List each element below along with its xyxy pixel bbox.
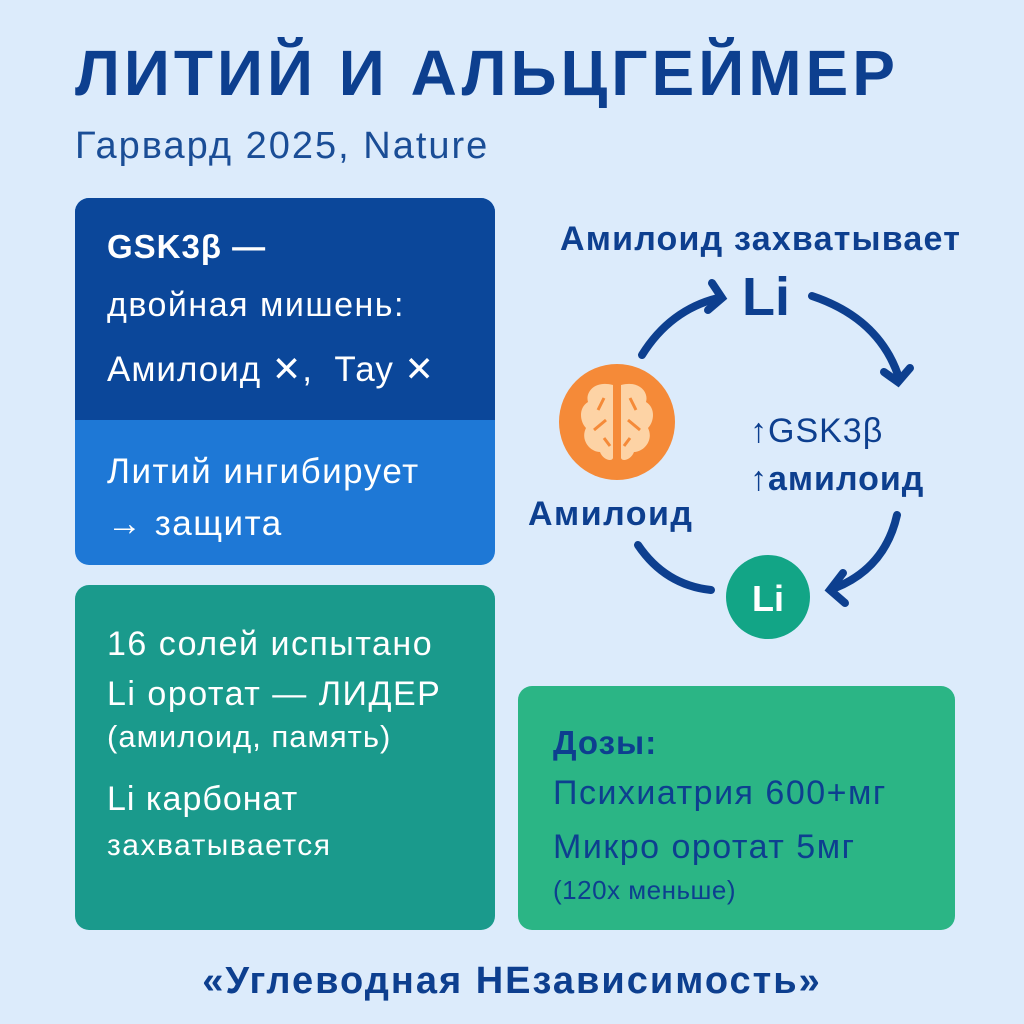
- text: up GSK3b: ↑GSK3β: [750, 412, 883, 450]
- text block: targets: Амилоид ✕, Тау ✕: [107, 350, 435, 389]
- text block: inhibits: [107, 452, 420, 543]
- arrow: bottom-right: [830, 515, 897, 603]
- heading: GSK3β —: [107, 228, 266, 265]
- cycle heading: Амилоид захватывает: [560, 220, 961, 258]
- text block: двойная мишень:: [107, 286, 405, 324]
- icon: Li circle: Li: [752, 578, 784, 619]
- icon: brain: [559, 364, 675, 480]
- title: ЛИТИЙ И АЛЬЦГЕЙМЕР: [75, 37, 899, 109]
- text block: (амилоид, память): [107, 719, 391, 754]
- heading: Дозы:: [553, 724, 657, 761]
- text block: (120x меньше): [553, 875, 736, 905]
- arrow: bottom-left: [638, 545, 711, 590]
- text block: carbonate: Li карбонат: [107, 780, 298, 818]
- arrow: top-right: [812, 296, 910, 382]
- text block: salts: 16 солей испытано: [107, 625, 433, 663]
- Li label: Li: [742, 267, 790, 327]
- text block: salts: [107, 625, 441, 713]
- text block: Психиатрия 600+мг: [553, 774, 887, 812]
- panel top: [75, 198, 495, 420]
- label: amyloid: Амилоид: [528, 495, 694, 533]
- icon: Li circle: [726, 555, 810, 639]
- panel: GSK3b: [75, 198, 495, 565]
- text block: Микро оротат 5мг: [553, 828, 856, 866]
- panel: salts: [75, 585, 495, 930]
- footer: «Углеводная НЕзависимость»: [202, 960, 822, 1002]
- arrow: top-left: [642, 283, 722, 355]
- text block: inhibits: Литий ингибирует: [107, 452, 420, 491]
- text block: salts: Li оротат — ЛИДЕР: [107, 675, 441, 713]
- text block: захватывается: [107, 829, 332, 862]
- subtitle: Гарвард 2025, Nature: [75, 125, 489, 167]
- text block: inhibits: → защита: [107, 504, 283, 543]
- panel: doses: [518, 686, 955, 930]
- text: up amyloid: ↑амилоид: [750, 460, 924, 498]
